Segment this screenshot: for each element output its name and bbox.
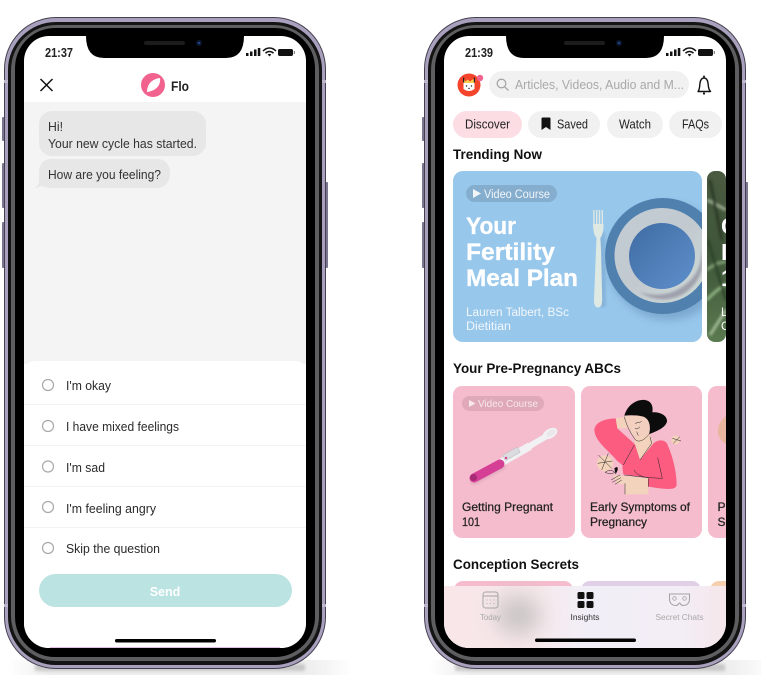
close icon bbox=[40, 79, 52, 91]
skin areas bbox=[615, 417, 628, 428]
tab: Secret Chats bbox=[656, 594, 704, 622]
hero title: Meal Plan bbox=[466, 265, 578, 292]
phone shadow bbox=[428, 660, 761, 675]
option: mixed: I have mixed feelings bbox=[66, 420, 179, 434]
left phone bbox=[2, 17, 353, 675]
chip: Discover bbox=[453, 111, 522, 138]
video course tag bbox=[462, 396, 544, 411]
option: okay: I'm okay bbox=[66, 379, 112, 393]
search field bbox=[489, 71, 689, 98]
status icons bbox=[246, 48, 295, 56]
next hero card peek bbox=[707, 171, 726, 342]
card peek: third ABC bbox=[708, 386, 748, 538]
pink top and arm bbox=[594, 418, 635, 466]
right phone bbox=[422, 17, 761, 675]
line work bbox=[598, 417, 681, 494]
card label: Early Symptoms of bbox=[590, 500, 691, 514]
home indicator bbox=[115, 639, 216, 642]
status time: 21:39 bbox=[465, 46, 493, 60]
bell icon bbox=[698, 76, 710, 95]
card label: 101 bbox=[462, 515, 480, 529]
option: sad: I'm sad bbox=[66, 461, 105, 475]
hero author: Dietitian bbox=[466, 321, 511, 333]
chat background bbox=[24, 102, 306, 364]
hero card: fertility meal plan bbox=[453, 171, 728, 342]
notch bbox=[500, 30, 670, 58]
notch bbox=[80, 30, 250, 58]
card: getting pregnant bbox=[453, 386, 575, 538]
next hero card peek: C bbox=[721, 321, 729, 333]
woman illustration bbox=[594, 400, 681, 494]
chip: Watch: Watch bbox=[619, 118, 651, 132]
device frame bbox=[424, 17, 746, 669]
hero title: Your bbox=[466, 213, 516, 240]
hero title bbox=[466, 217, 577, 286]
option: skip: Skip the question bbox=[66, 542, 160, 556]
card label bbox=[590, 500, 691, 529]
pregnancy test bbox=[470, 425, 559, 481]
tab: Secret Chats: Secret Chats bbox=[656, 613, 704, 622]
message bubble: greeting: Your new cycle has started. bbox=[48, 137, 197, 151]
video course tag bbox=[466, 185, 557, 202]
screen: chat bbox=[24, 36, 306, 648]
tab: Insights bbox=[570, 592, 600, 622]
message bubble: question bbox=[34, 159, 170, 188]
plate illustration bbox=[605, 198, 702, 322]
send button bbox=[39, 574, 292, 607]
tab: Today bbox=[480, 592, 501, 622]
next hero card peek: I bbox=[721, 239, 727, 265]
device frame bbox=[4, 17, 326, 669]
hero author: Lauren Talbert, BSc bbox=[466, 307, 569, 319]
option: sad bbox=[42, 461, 105, 475]
chip: FAQs bbox=[669, 111, 722, 138]
tab: Today: Today bbox=[480, 613, 501, 622]
phone shadow bbox=[28, 660, 332, 675]
home indicator bbox=[535, 638, 636, 642]
message bubble: greeting bbox=[39, 111, 206, 156]
chip: Saved: Saved bbox=[557, 118, 588, 132]
message bubble: greeting: Hi! bbox=[48, 120, 63, 134]
chip: Discover: Discover bbox=[465, 118, 510, 132]
fork bbox=[593, 210, 606, 308]
send button: Send bbox=[150, 585, 180, 599]
card label: Pregnancy bbox=[590, 515, 647, 529]
chip: Saved bbox=[528, 111, 600, 138]
next hero card peek: 1 bbox=[721, 265, 734, 291]
heading: Conception Secrets: Conception Secrets bbox=[453, 557, 579, 572]
side buttons bbox=[422, 117, 748, 268]
card label: Getting Pregnant bbox=[462, 500, 554, 514]
answer sheet bbox=[24, 361, 306, 648]
hero title: Fertility bbox=[466, 239, 556, 266]
video course tag: Video Course bbox=[484, 189, 550, 201]
card: early symptoms bbox=[581, 386, 702, 538]
card peek: third ABC: Pr bbox=[718, 500, 730, 514]
card peek: third ABC: Se bbox=[718, 515, 733, 529]
heading: Trending Now: Trending Now bbox=[453, 147, 542, 162]
hero author bbox=[466, 307, 569, 330]
tab bar bbox=[444, 586, 726, 648]
chip: Watch bbox=[607, 111, 663, 138]
status time: 21:37 bbox=[45, 46, 73, 60]
hair bbox=[624, 400, 667, 434]
video course tag: Video Course bbox=[478, 398, 538, 410]
notification dot bbox=[477, 75, 483, 81]
Flo logo bbox=[141, 73, 165, 97]
avatar bbox=[458, 74, 480, 96]
search field: Articles, Videos, Audio and M... bbox=[515, 78, 684, 92]
next hero card peek: C bbox=[721, 213, 738, 239]
card label bbox=[462, 500, 554, 529]
status icons bbox=[666, 48, 715, 56]
option: angry: I'm feeling angry bbox=[66, 502, 157, 516]
Flo name: Flo bbox=[171, 78, 189, 94]
tab: Insights: Insights bbox=[570, 613, 600, 622]
screen: insights bbox=[444, 36, 750, 648]
row of secret cards bbox=[454, 581, 750, 621]
heading: Your Pre-Pregnancy ABCs: Your Pre-Pregnancy ABCs bbox=[453, 361, 621, 376]
option: okay bbox=[42, 379, 112, 393]
next hero card peek: L bbox=[721, 307, 728, 319]
chip: FAQs: FAQs bbox=[682, 118, 709, 132]
message bubble: question: How are you feeling? bbox=[48, 168, 161, 182]
side buttons bbox=[2, 117, 328, 268]
